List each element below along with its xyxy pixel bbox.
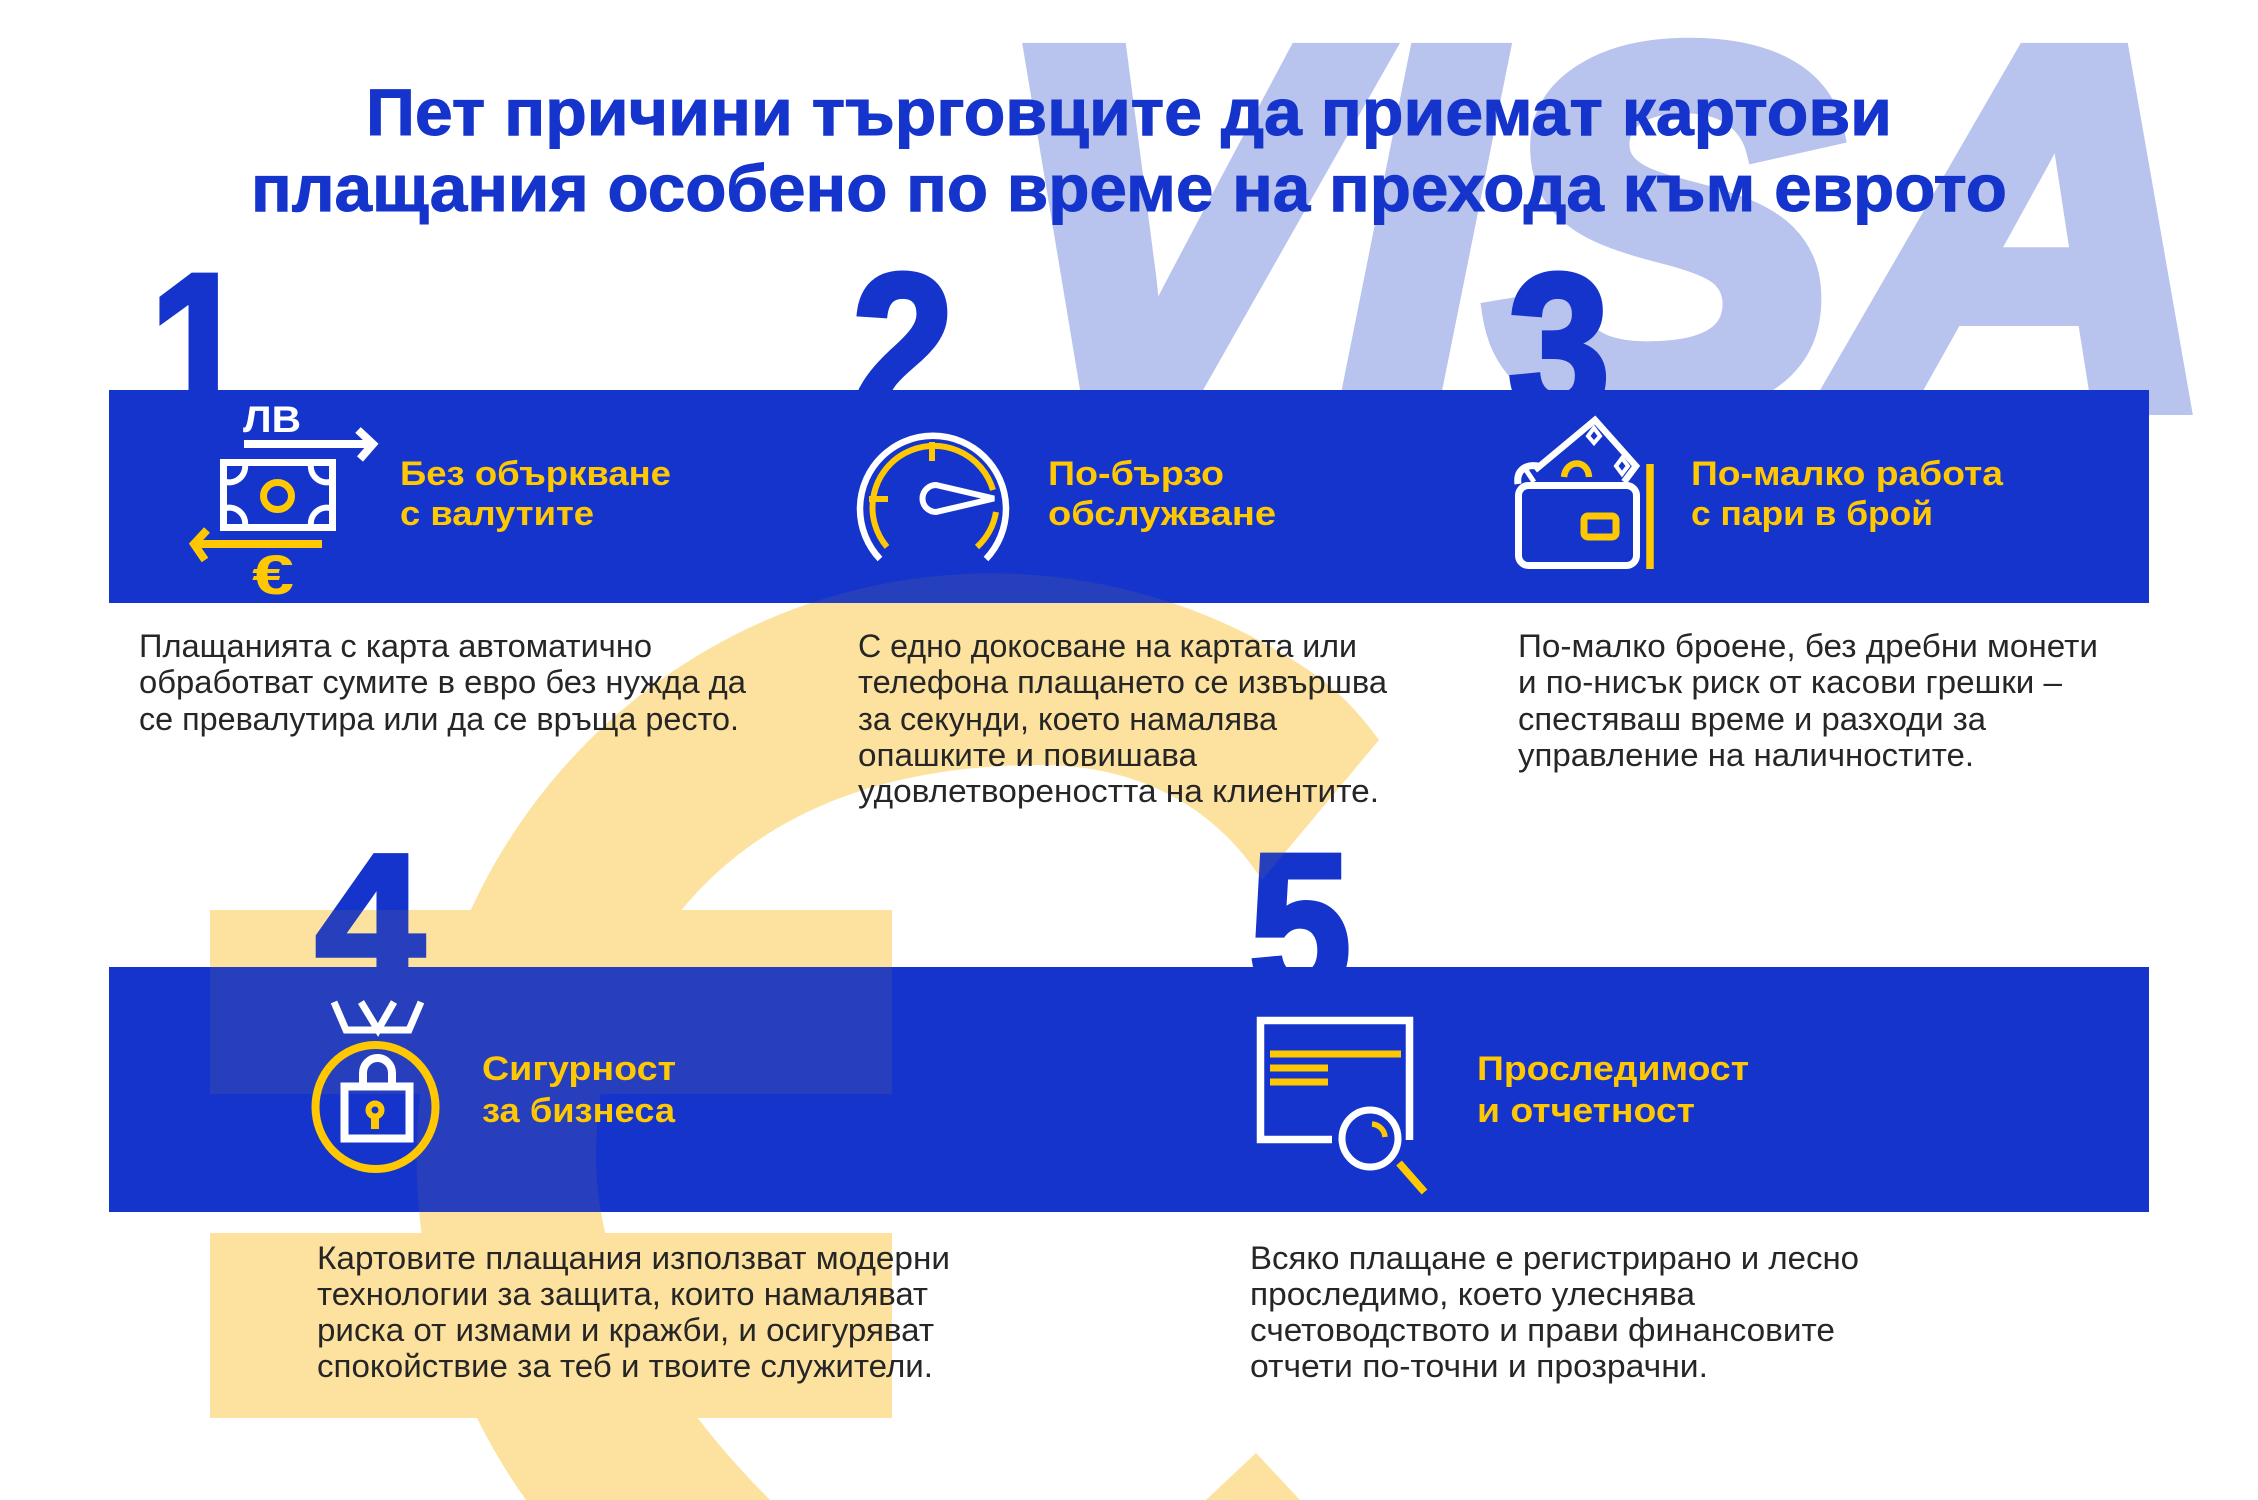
title [251,75,2007,225]
heading: card 2 [1048,455,1276,533]
text: card 5: отчети по-точни и прозрачни. [1250,1348,1708,1384]
text: card 2 [858,628,1387,809]
panel: top band with numbers 1, 2, 3: 1 [150,232,248,460]
title: Пет причини търговците да приемат картови [366,75,1892,149]
heading: card 2: обслужване [1048,495,1276,533]
text: card 3: спестяваш време и разходи за [1518,701,1986,737]
background: euro tint over bands [210,573,1379,1500]
panel: bottom band with numbers 4, 5: 5 [1249,812,1351,1040]
text: card 4: риска от измами и кражби, и осигуряват [317,1312,934,1348]
heading: card 1 [400,455,671,533]
text: card 2: С едно докосване на картата или [858,628,1357,664]
background: euro symbol [210,573,1379,1500]
heading: card 3: с пари в брой [1691,495,1933,533]
text: card 3: и по-нисък риск от касови грешки – [1518,664,2062,700]
text: card 3 [1518,628,2098,773]
text: card 2: телефона плащането се извършва [858,664,1387,700]
text: card 1: обработват сумите в евро без нужда да [139,664,746,700]
panel: top band with numbers 1, 2, 3 [109,232,2149,603]
heading: card 3 [1691,455,2004,533]
heading: card 5 [1477,1050,1749,1130]
icon: currency exchange banknote: € [252,543,294,606]
heading: card 4: Сигурност [482,1050,676,1088]
heading: card 5: и отчетност [1477,1092,1695,1130]
heading: card 3: По-малко работа [1691,455,2004,493]
icon: currency exchange banknote: ЛВ [243,399,301,440]
heading: card 1: Без объркване [400,455,671,493]
text: card 5 [1250,1240,1859,1384]
icon: currency exchange banknote [194,399,373,606]
text: card 3: По-малко броене, без дребни монети [1518,628,2098,664]
title: плащания особено по време на прехода към еврото [251,151,2007,225]
text: card 5: счетоводството и прави финансовите [1250,1312,1835,1348]
heading: card 4: за бизнеса [482,1092,676,1130]
text: card 5: Всяко плащане е регистрирано и лесно [1250,1240,1859,1276]
icon: document with magnifier [1260,1020,1424,1192]
heading: card 2: По-бързо [1048,455,1224,493]
text: card 5: проследимо, което улеснява [1250,1276,1695,1312]
text: card 4 [317,1240,950,1384]
text: card 2: удовлетвореността на клиентите. [858,773,1379,809]
text: card 2: за секунди, което намалява [858,701,1277,737]
heading: card 4 [482,1050,676,1130]
panel: bottom band with numbers 4, 5: 4 [316,818,424,1019]
panel: top band with numbers 1, 2, 3: 3 [1508,232,1610,460]
icon: wallet with banknote [1518,420,1650,569]
text: card 4: Картовите плащания използват модерни [317,1240,950,1276]
text: card 1: се превалутира или да се връща ресто. [139,701,739,737]
heading: card 1: с валутите [400,495,594,533]
text: card 4: технологии за защита, които намаляват [317,1276,928,1312]
text: card 4: спокойствие за теб и твоите служители. [317,1348,933,1384]
heading: card 5: Проследимост [1477,1050,1749,1088]
icon: speedometer [860,436,1006,559]
text: card 1 [139,628,746,737]
panel: bottom band with numbers 4, 5 [109,812,2149,1212]
text: card 2: опашките и повишава [858,737,1197,773]
text: card 1: Плащанията с карта автоматично [139,628,652,664]
panel: top band with numbers 1, 2, 3: 2 [852,232,954,460]
text: card 3: управление на наличностите. [1518,737,1974,773]
icon: padlock with crown [316,1002,436,1169]
